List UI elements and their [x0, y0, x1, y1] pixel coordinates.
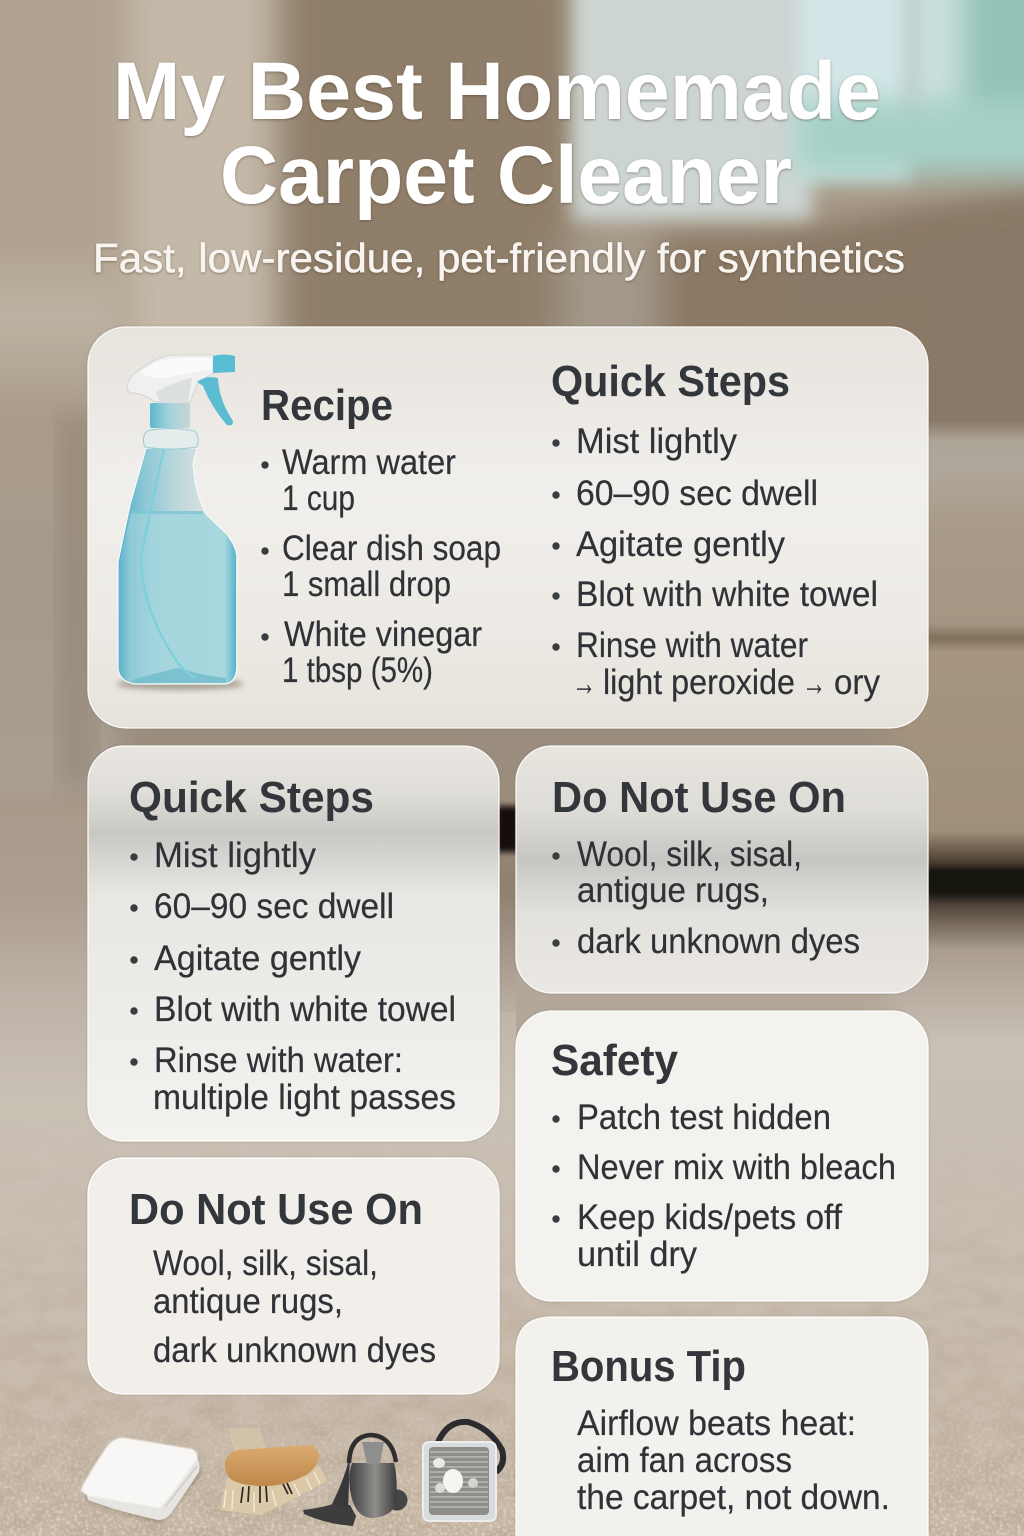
title — [113, 46, 881, 221]
text: airflow tip — [577, 1404, 890, 1517]
panel: bonus tip — [516, 1317, 928, 1536]
list: safety rules: Keep kids/pets off — [577, 1198, 842, 1237]
list: recipe ingredients: 1 small drop — [282, 565, 451, 604]
title: Carpet Cleaner — [220, 130, 792, 221]
list: recipe ingredients: 1 tbsp (5%) — [282, 651, 433, 690]
heading: safety: Safety — [551, 1036, 678, 1085]
icon: spray bottle — [116, 354, 244, 690]
list: quick steps: Agitate gently — [576, 525, 785, 564]
list: quick steps: light peroxide — [603, 663, 795, 702]
panel: do not use on (right) — [516, 746, 928, 993]
list: recipe ingredients: Warm water — [282, 443, 456, 482]
heading: do not use on: Do Not Use On — [129, 1185, 423, 1234]
list: recipe ingredients: White vinegar — [284, 615, 482, 654]
list: safety rules: until dry — [577, 1235, 697, 1274]
text: airflow tip: Airflow beats heat: — [577, 1404, 856, 1443]
list: unsuitable materials: dark unknown dyes — [577, 922, 860, 961]
heading: recipe: Recipe — [261, 381, 393, 430]
icon: folded white towel — [81, 1438, 201, 1523]
list: safety rules: Patch test hidden — [577, 1098, 831, 1137]
list: quick steps: Mist lightly — [576, 422, 737, 461]
list: quick steps: Agitate gently — [154, 939, 361, 978]
text: airflow tip: the carpet, not down. — [577, 1478, 890, 1517]
list: quick steps: 60–90 sec dwell — [576, 474, 818, 513]
heading: quick steps: Quick Steps — [551, 357, 790, 406]
list: quick steps: → — [802, 662, 826, 703]
panel: safety — [516, 1011, 928, 1301]
list: quick steps: → — [572, 662, 596, 703]
list: quick steps: Rinse with water — [576, 626, 808, 665]
list: quick steps: Rinse with water: — [154, 1041, 403, 1080]
list: recipe ingredients: Clear dish soap — [282, 529, 501, 568]
text: unsuitable materials: antique rugs, — [153, 1282, 343, 1321]
panel: recipe and quick steps — [88, 327, 928, 728]
icon: canister vacuum — [303, 1435, 408, 1526]
text: unsuitable materials — [153, 1244, 436, 1370]
panel: do not use on (left) — [88, 1158, 499, 1394]
list: quick steps: Blot with white towel — [576, 575, 878, 614]
panel: quick steps — [88, 746, 499, 1141]
text: airflow tip: aim fan across — [577, 1441, 792, 1480]
list: quick steps: Mist lightly — [154, 836, 316, 875]
list: quick steps: 60–90 sec dwell — [154, 887, 394, 926]
heading: quick steps: Quick Steps — [129, 773, 374, 822]
list: unsuitable materials — [552, 835, 860, 961]
list: recipe ingredients: 1 cup — [282, 479, 355, 518]
list: unsuitable materials: antigue rugs, — [577, 871, 769, 910]
icon: scrub brush — [220, 1428, 327, 1515]
heading: do not use on: Do Not Use On — [552, 773, 846, 822]
list: quick steps: multiple light passes — [153, 1078, 456, 1117]
list: quick steps — [130, 836, 456, 1117]
list: safety rules: Never mix with bleach — [577, 1148, 896, 1187]
list: unsuitable materials: Wool, silk, sisal, — [577, 835, 802, 874]
icon: box fan — [423, 1422, 503, 1521]
list: quick steps: ory — [834, 663, 880, 702]
text: unsuitable materials: Wool, silk, sisal, — [153, 1244, 378, 1283]
list: quick steps — [552, 422, 880, 703]
text: unsuitable materials: dark unknown dyes — [153, 1331, 436, 1370]
list: recipe ingredients — [261, 443, 501, 690]
heading: bonus tip: Bonus Tip — [551, 1342, 746, 1391]
subtitle: Fast, low-residue, pet-friendly for synthetics — [93, 235, 905, 281]
list: quick steps: Blot with white towel — [154, 990, 456, 1029]
list: safety rules — [552, 1098, 896, 1274]
title: My Best Homemade — [113, 46, 881, 137]
